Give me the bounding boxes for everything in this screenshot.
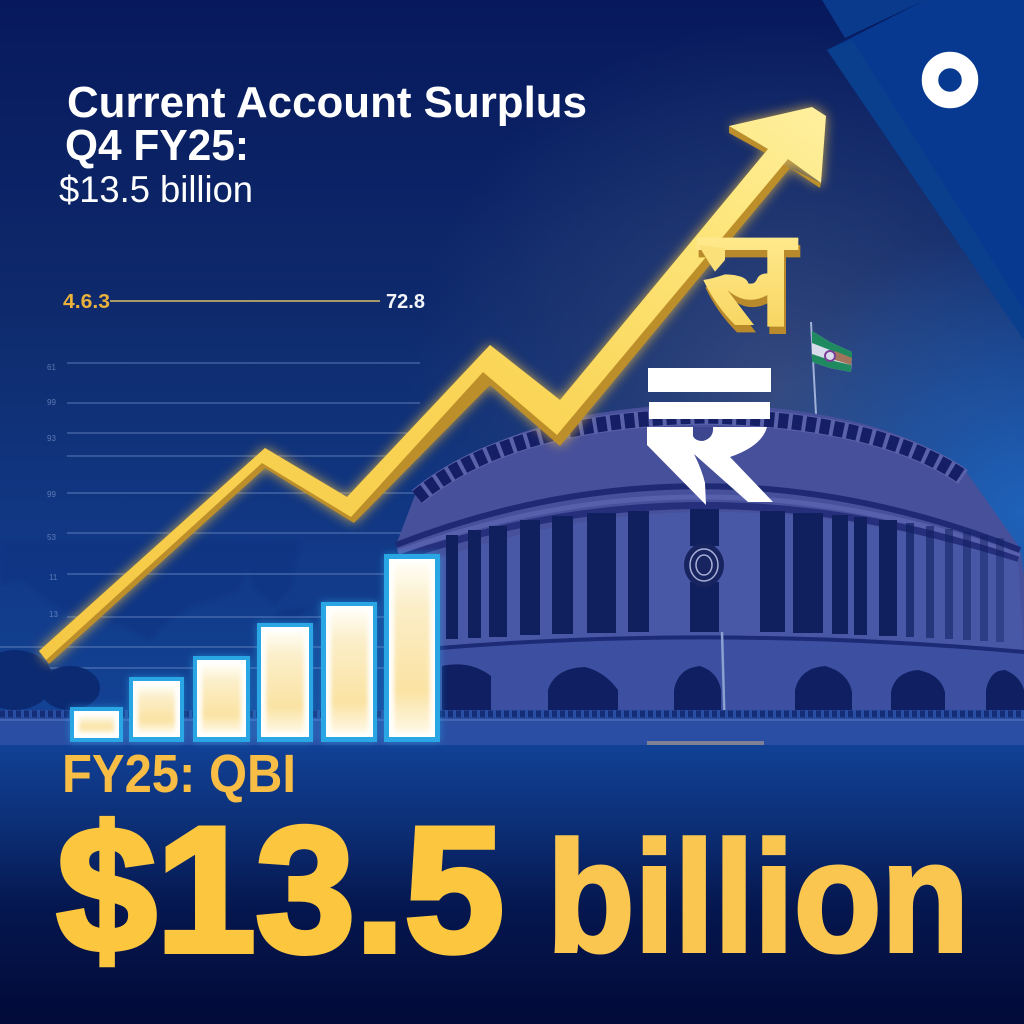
title: $13.5 billion <box>59 169 253 210</box>
lamp pole <box>722 632 725 736</box>
title <box>59 78 587 210</box>
chart axis labels: 61 <box>47 363 56 372</box>
title: Q4 FY25: <box>65 121 249 170</box>
bar outlines <box>70 554 440 742</box>
balustrade and lower wall <box>0 710 1024 748</box>
icon: white rupee sign <box>647 368 773 505</box>
range line label: 4.6.3 <box>63 291 110 313</box>
headline value: billion <box>547 810 969 985</box>
top-right corner panels <box>822 0 1024 340</box>
icon: white ring <box>930 60 970 100</box>
chart axis labels: 11 <box>49 573 58 582</box>
building silhouette <box>396 404 1024 745</box>
arrow: rising gold line <box>39 107 826 664</box>
symbol knob <box>698 245 725 272</box>
subheading: FY25: QBI <box>62 744 296 804</box>
cornice <box>396 486 1020 560</box>
chart grid lines <box>0 363 420 668</box>
world map silhouette <box>0 540 310 640</box>
bar whites <box>74 559 435 738</box>
tall dark windows <box>446 509 1004 642</box>
central emblem <box>684 543 724 587</box>
parliament building <box>396 404 1024 745</box>
left trees <box>0 650 100 710</box>
range line label <box>63 291 425 313</box>
chart axis labels: 99 <box>47 398 56 407</box>
bar chart <box>70 554 440 742</box>
headline value: $13.5 <box>57 790 504 989</box>
chart axis labels: 13 <box>49 610 58 619</box>
arrow glow <box>39 107 826 664</box>
bar fills <box>79 564 430 733</box>
chart axis labels: 53 <box>47 533 56 542</box>
flag on pole <box>811 322 852 414</box>
arrow bevel <box>39 126 821 664</box>
shrubs <box>442 664 1024 710</box>
bottom panel <box>0 745 1024 1024</box>
chart axis labels: 93 <box>47 434 56 443</box>
icon: gold devanagari symbol <box>697 238 800 334</box>
upper window band <box>417 416 963 497</box>
chart axis labels <box>47 363 58 619</box>
symbol bevel <box>699 245 800 334</box>
chart axis labels: 99 <box>47 490 56 499</box>
title: Current Account Surplus <box>67 78 587 127</box>
arrow face <box>39 107 826 660</box>
colonnade <box>428 512 1024 650</box>
plinth <box>440 637 1024 745</box>
range line label: 72.8 <box>386 291 425 313</box>
symbol face <box>697 238 798 327</box>
headline value <box>57 790 969 989</box>
bar glow <box>70 554 440 742</box>
